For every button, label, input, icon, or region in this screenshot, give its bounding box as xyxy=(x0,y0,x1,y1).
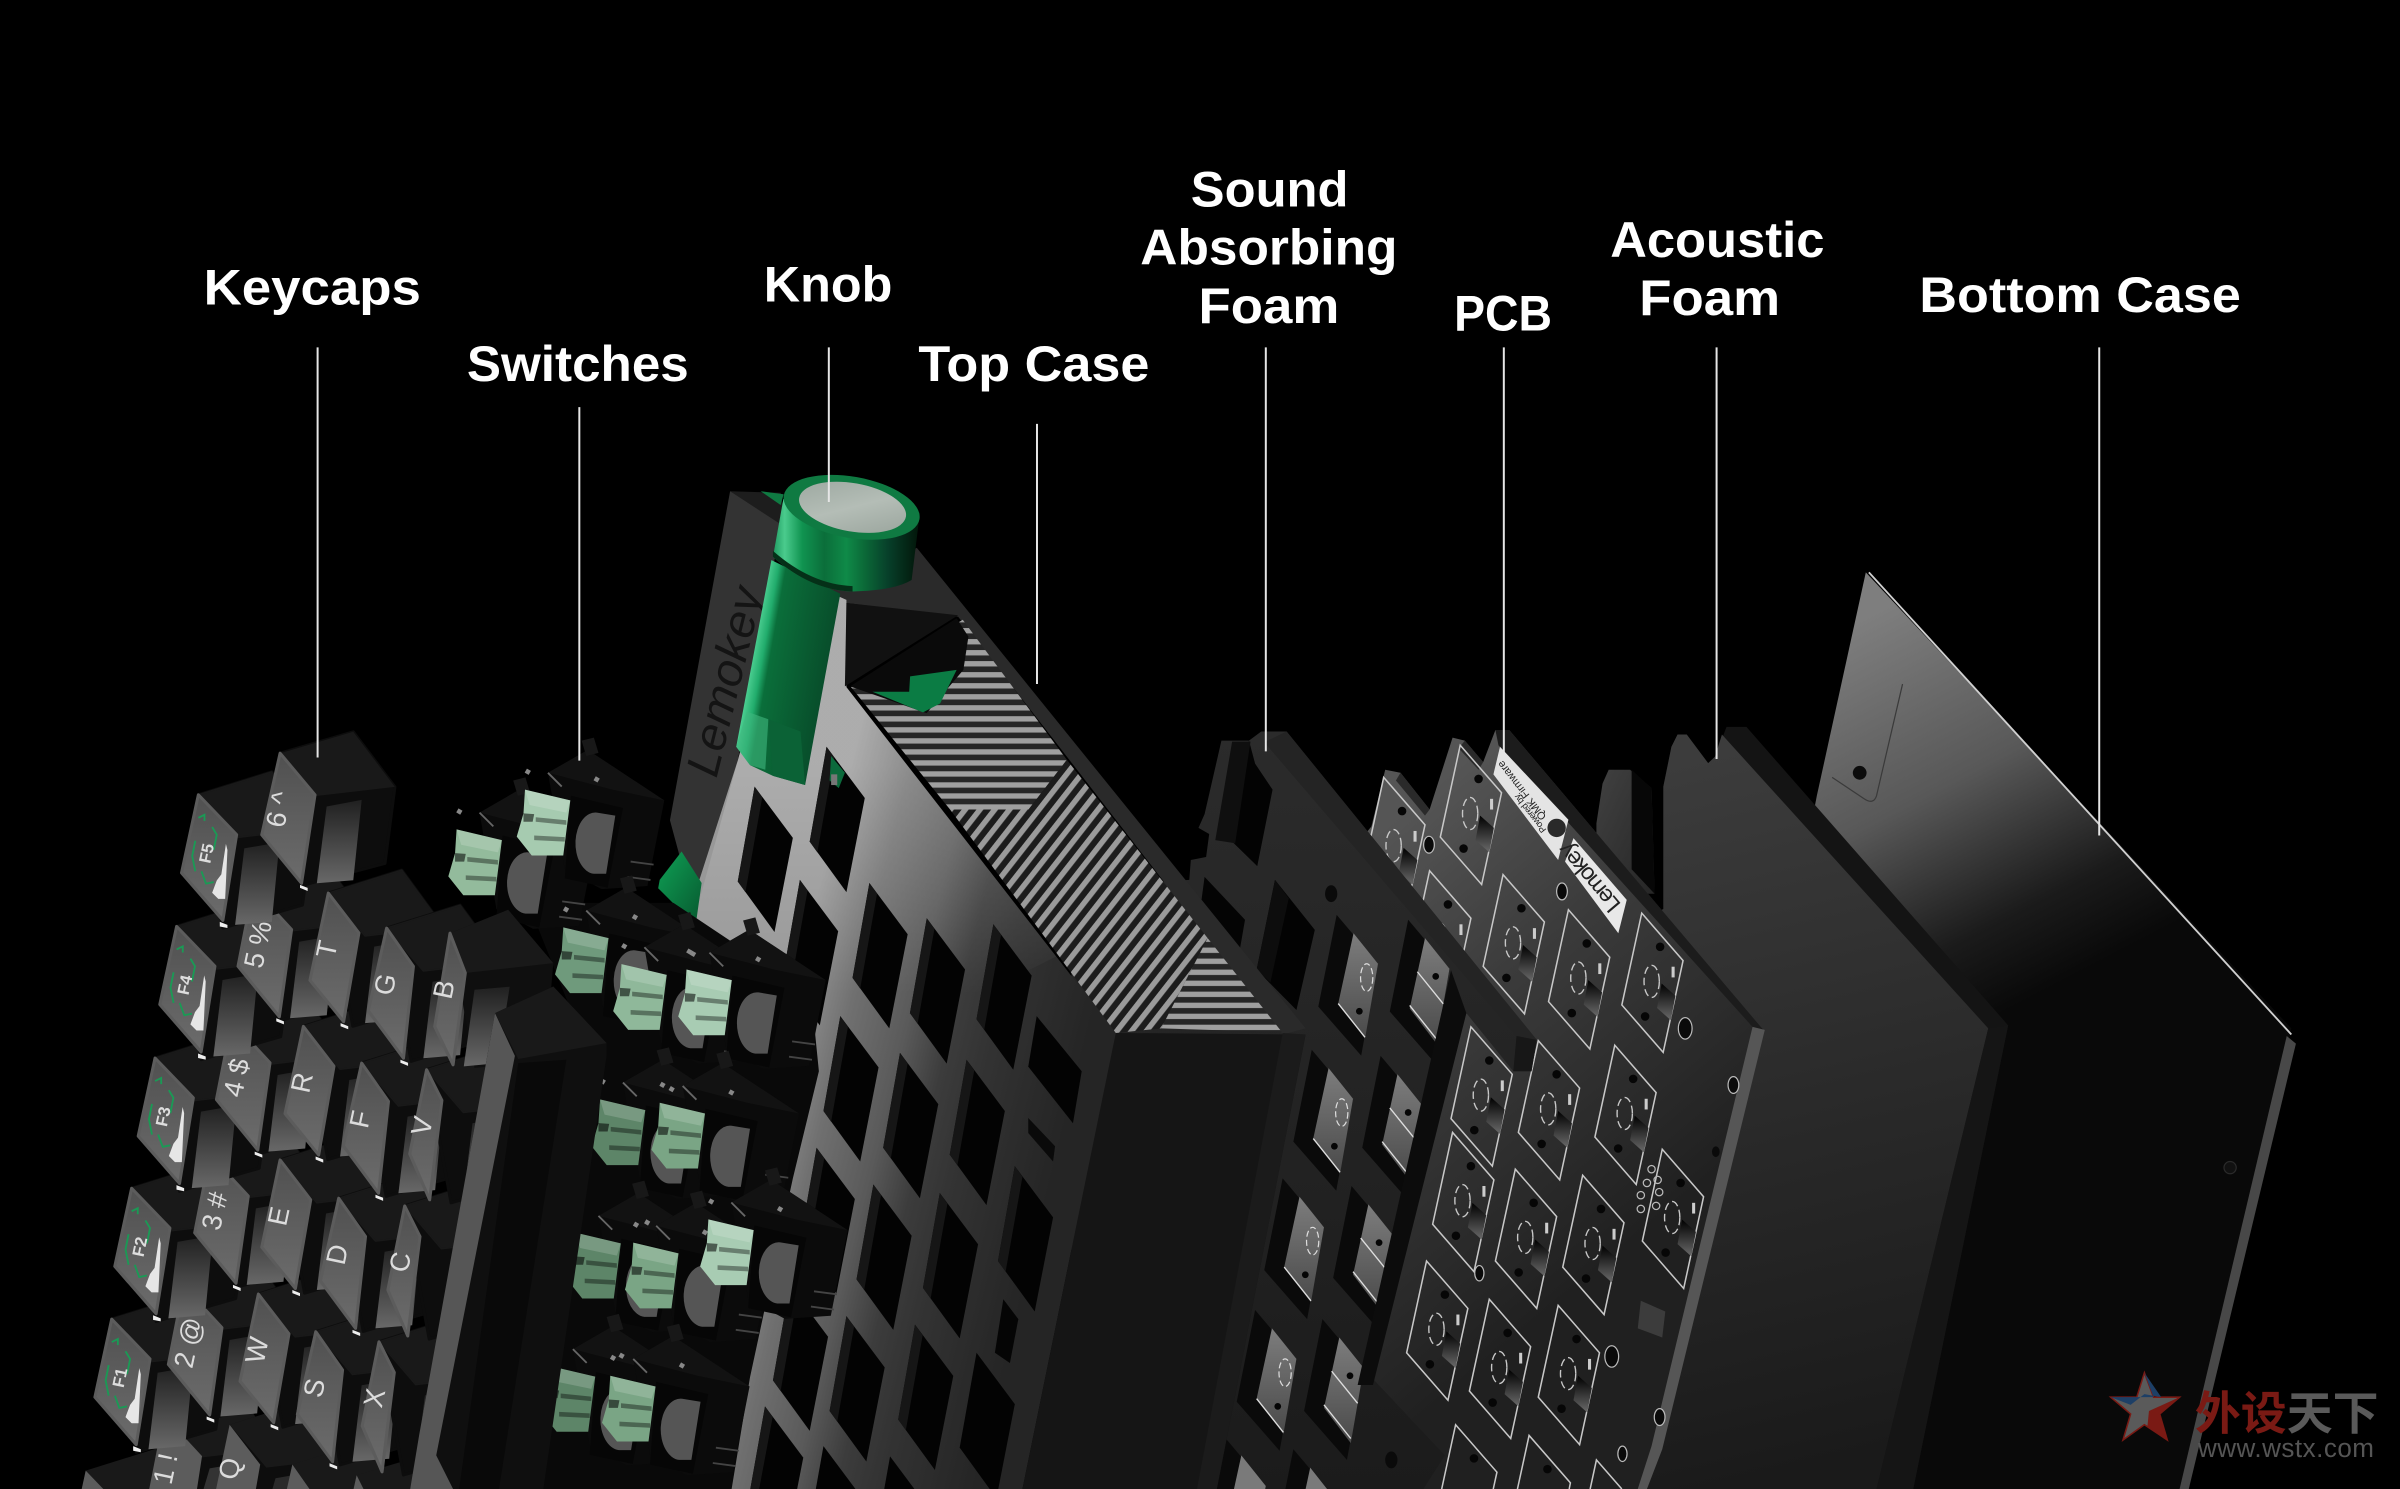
switch 5 xyxy=(678,917,826,1069)
label: Sound Absorbing Foam: Absorbing xyxy=(1140,219,1397,276)
row 2 keys: 2 @ xyxy=(168,1314,209,1371)
switch 9 xyxy=(625,1191,772,1342)
leader line xyxy=(317,347,319,758)
watermark star logo xyxy=(2111,1373,2180,1440)
watermark: 外设天下 xyxy=(2195,1387,2379,1439)
label: Bottom Case: Bottom Case xyxy=(1919,266,2241,323)
row 4 keys: F xyxy=(343,1108,377,1131)
switch 3 xyxy=(555,875,703,1027)
leader line xyxy=(2098,347,2100,836)
space bar xyxy=(410,986,607,1489)
firmware label xyxy=(1493,747,1568,860)
layer: keycaps xyxy=(82,732,607,1489)
PCB rim xyxy=(1638,1027,1765,1489)
leader line xyxy=(828,347,830,502)
row 3 keys: 3 # xyxy=(195,1188,234,1233)
layer: switches xyxy=(448,738,848,1489)
foam windows xyxy=(1214,880,1449,1489)
row 3 keys: C xyxy=(383,1249,417,1275)
plate windows xyxy=(738,747,1082,1489)
foam tab cut-outs xyxy=(1202,741,1273,950)
switch 7 xyxy=(651,1051,799,1202)
firmware label: Powered by xyxy=(1512,792,1548,835)
layer: top case xyxy=(667,491,1306,1489)
switch 12 xyxy=(602,1324,750,1475)
front dark block xyxy=(1022,1033,1306,1489)
leader line xyxy=(1503,347,1505,753)
leader line xyxy=(578,407,580,761)
row 2 keys: X xyxy=(357,1386,391,1410)
foam holes xyxy=(1325,885,1397,1468)
layer: sound absorbing foam xyxy=(1071,731,1537,1489)
row 2 keys: W xyxy=(239,1334,275,1366)
row 5 keys: T xyxy=(310,938,344,961)
row 6 keys: F5 xyxy=(195,842,218,865)
foam top rim xyxy=(1264,731,1537,1040)
foam bar end xyxy=(1513,1036,1537,1071)
row 4 keys: V xyxy=(405,1113,439,1138)
pin header pads xyxy=(1637,1165,1663,1213)
layer: bottom case xyxy=(1684,572,2296,1489)
row 4 keys: R xyxy=(284,1070,319,1096)
label: Acoustic Foam: Acoustic xyxy=(1610,211,1824,268)
row 5 keys: 5 % xyxy=(238,918,278,971)
case side plate xyxy=(670,491,784,918)
switch footprints xyxy=(1364,745,1704,1489)
switch 6 xyxy=(592,1047,739,1199)
row 3 keys: F2 xyxy=(129,1235,151,1258)
row 4 keys: 4 $ xyxy=(217,1056,255,1100)
label: Switches: Switches xyxy=(467,335,689,392)
row 4 keys xyxy=(138,999,541,1203)
row 1 keys: 1 ! xyxy=(147,1450,184,1487)
row 3 keys: D xyxy=(320,1241,354,1267)
row 4 keys: F3 xyxy=(152,1105,175,1128)
row 3 keys xyxy=(115,1132,519,1339)
label: Sound Absorbing Foam: Foam xyxy=(1198,277,1339,334)
green part behind switches xyxy=(658,851,702,920)
switch block backing xyxy=(490,903,819,1489)
screw hole with recess outline xyxy=(1832,684,2236,1174)
acoustic foam rim xyxy=(1877,1025,2008,1489)
foam bar inner wall xyxy=(1358,970,1466,1385)
PCB mounting holes xyxy=(1424,836,1739,1461)
label: Acoustic Foam: Foam xyxy=(1639,269,1780,326)
knob shaft xyxy=(736,560,840,785)
knob xyxy=(736,465,925,785)
row 2 keys: F1 xyxy=(109,1366,131,1389)
row 6 keys xyxy=(182,732,395,928)
row 5 keys: F4 xyxy=(174,973,196,997)
row 6 keys: 6 ^ xyxy=(260,789,297,830)
row 5 keys: B xyxy=(427,977,461,1002)
label: Knob: Knob xyxy=(764,255,892,312)
bottom case right rim xyxy=(2180,1036,2296,1489)
green knob reflection xyxy=(872,670,957,712)
switch 2 xyxy=(517,738,664,889)
row 1 keys: Q xyxy=(212,1455,247,1482)
leader line xyxy=(1716,347,1718,759)
label: Top Case: Top Case xyxy=(918,335,1149,392)
label: Keycaps: Keycaps xyxy=(204,259,421,316)
row 2 keys: S xyxy=(297,1376,331,1400)
second foam tab xyxy=(1596,770,1655,894)
acoustic foam outer shape xyxy=(1531,727,2008,1489)
stripe panel xyxy=(845,603,1282,1033)
brand label: Lemokey xyxy=(1552,837,1626,918)
green detail in window xyxy=(830,756,845,788)
watermark url: www.wstx.com xyxy=(2197,1433,2374,1463)
label: Acoustic Foam xyxy=(1610,211,1824,759)
top ridge xyxy=(827,548,1306,1034)
reset button xyxy=(1638,1301,1665,1337)
brand text on side: Lemokey xyxy=(676,579,773,781)
row 5 keys: G xyxy=(368,971,402,998)
switch 1 xyxy=(448,777,596,929)
layer: acoustic foam xyxy=(1531,727,2008,1489)
leader line xyxy=(1265,347,1267,751)
bottom case highlight edge xyxy=(1869,572,2291,1034)
row 3 keys: E xyxy=(261,1204,296,1228)
switch 10 xyxy=(700,1167,848,1319)
switch 4 xyxy=(613,912,761,1064)
label: Sound Absorbing Foam: Sound xyxy=(1191,161,1348,218)
switch 8 xyxy=(567,1181,715,1332)
firmware label: QMK Firmware xyxy=(1495,758,1549,822)
label: PCB: PCB xyxy=(1454,285,1552,342)
switch 11 xyxy=(542,1314,689,1465)
leader line xyxy=(1036,424,1038,684)
knob cap xyxy=(773,465,925,591)
dark recess xyxy=(845,603,958,686)
layer: PCB xyxy=(1286,730,1765,1489)
PCB dark top rim xyxy=(1495,730,1763,1030)
row 5 keys xyxy=(160,865,553,1068)
row 1 keys xyxy=(82,1392,444,1489)
main gray plate xyxy=(667,574,1116,1489)
label: Sound Absorbing Foam xyxy=(1140,161,1397,751)
row 2 keys xyxy=(95,1263,494,1475)
watermark xyxy=(2111,1373,2379,1463)
